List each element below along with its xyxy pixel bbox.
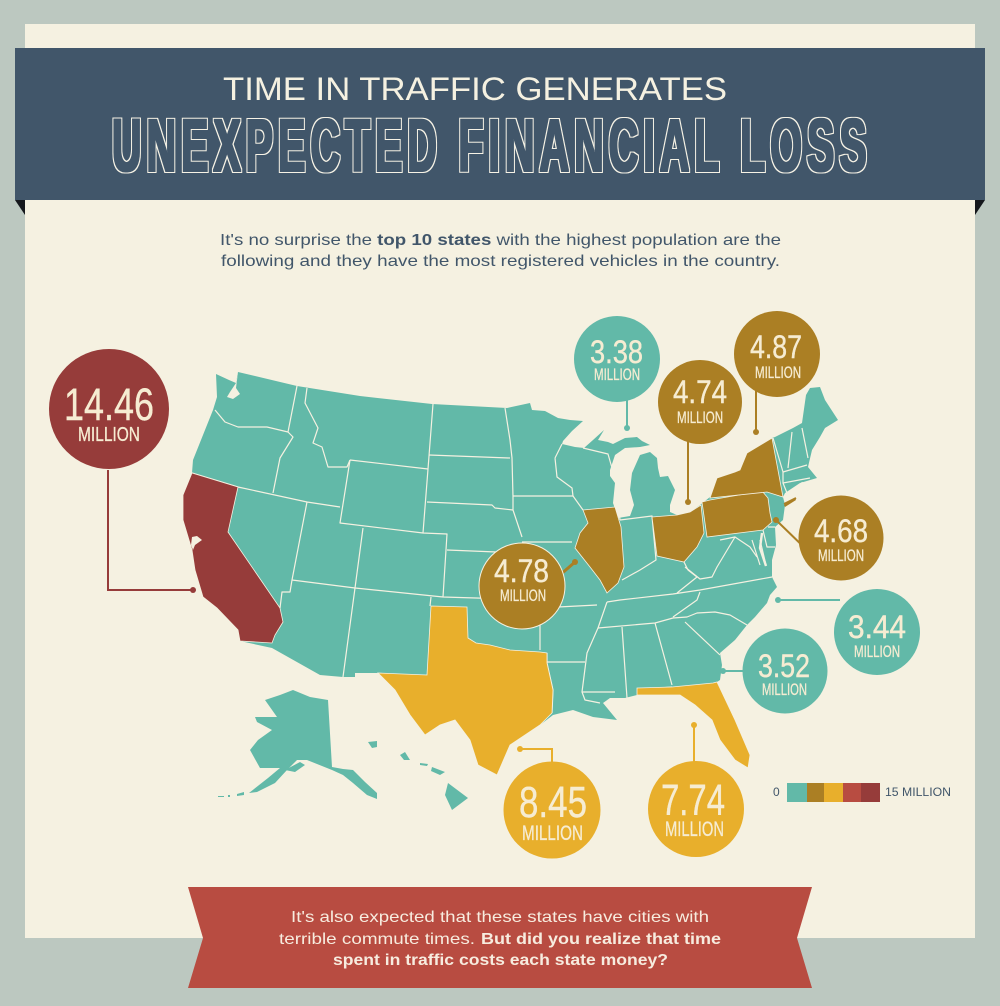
legend bbox=[773, 783, 951, 802]
title line 1: TIME IN TRAFFIC GENERATES bbox=[223, 71, 727, 107]
bottom ribbon callout: terrible commute times. bbox=[279, 931, 475, 948]
bubble: Georgia 3.52 million: 3.52 bbox=[758, 648, 810, 684]
bubble: California 14.46 million: 14.46 bbox=[64, 379, 154, 430]
state borders bbox=[192, 386, 810, 713]
bottom ribbon callout: But did you realize that time bbox=[481, 931, 721, 948]
bubble: Texas 8.45 million: MILLION bbox=[522, 822, 583, 845]
header banner bbox=[15, 48, 985, 215]
bottom ribbon callout bbox=[188, 887, 812, 988]
bottom ribbon callout: It's also expected that these states have cities with bbox=[291, 909, 709, 926]
bubble: California 14.46 million bbox=[49, 349, 169, 469]
title line 2: UNEXPECTED FINANCIAL LOSS bbox=[112, 104, 867, 187]
map of the United States bbox=[183, 372, 838, 810]
contiguous states bbox=[183, 372, 838, 775]
state: New York bbox=[710, 438, 783, 498]
intro text: following and they have the most registered vehicles in the country. bbox=[221, 253, 780, 270]
Long Island bbox=[784, 498, 796, 507]
bubble: Wisconsin area 3.38 million: 3.38 bbox=[590, 334, 643, 370]
bubble: Illinois 4.78 million: MILLION bbox=[500, 587, 546, 605]
bubble: Texas 8.45 million: 8.45 bbox=[519, 778, 587, 827]
bubble: Illinois 4.78 million: 4.78 bbox=[494, 553, 549, 589]
Chesapeake Bay bbox=[760, 533, 766, 566]
bubble: Florida 7.74 million bbox=[648, 761, 744, 857]
bubble: Pennsylvania 4.68 million: 4.68 bbox=[814, 513, 868, 549]
bubble: North Carolina 3.44 million: 3.44 bbox=[848, 609, 906, 645]
bubble: Texas 8.45 million bbox=[504, 762, 600, 858]
bubble: Pennsylvania 4.68 million: MILLION bbox=[818, 547, 864, 565]
bubble: Wisconsin area 3.38 million bbox=[574, 316, 660, 402]
intro text: It's no surprise the top 10 states with the highest population are the bbox=[220, 232, 781, 249]
legend: 15 MILLION bbox=[885, 785, 951, 799]
bubble: North Carolina 3.44 million: MILLION bbox=[854, 643, 900, 661]
leader lines bbox=[108, 390, 840, 770]
bubble: California 14.46 million: MILLION bbox=[78, 424, 140, 446]
bubble: New York 4.87 million: MILLION bbox=[755, 364, 801, 382]
bubble: Ohio 4.74 million: MILLION bbox=[677, 409, 723, 427]
legend: 0 bbox=[773, 785, 780, 799]
state: Ohio bbox=[652, 505, 704, 562]
bubble: Georgia 3.52 million: MILLION bbox=[762, 681, 807, 699]
state: Pennsylvania bbox=[702, 491, 772, 537]
bubble: Wisconsin area 3.38 million: MILLION bbox=[594, 366, 640, 384]
bubble: Illinois 4.78 million bbox=[479, 543, 565, 629]
intro text bbox=[220, 232, 781, 270]
bubble: Pennsylvania 4.68 million bbox=[798, 496, 884, 580]
Puget Sound inlet bbox=[227, 372, 240, 399]
bubble: New York 4.87 million bbox=[734, 311, 820, 397]
bubble: Georgia 3.52 million bbox=[742, 628, 828, 714]
bottom ribbon callout: spent in traffic costs each state money? bbox=[333, 952, 668, 969]
state: Florida bbox=[637, 682, 750, 768]
bubble: New York 4.87 million: 4.87 bbox=[750, 329, 802, 365]
Aleutian islands bbox=[218, 762, 305, 797]
Alaska bbox=[249, 690, 377, 799]
state: Illinois bbox=[575, 507, 624, 593]
Hawaii bbox=[368, 741, 468, 810]
bubble: Ohio 4.74 million: 4.74 bbox=[673, 374, 727, 410]
bubble: Florida 7.74 million: MILLION bbox=[665, 818, 724, 841]
state: California bbox=[183, 473, 283, 643]
bubble: Florida 7.74 million: 7.74 bbox=[661, 776, 725, 825]
state: Texas bbox=[378, 606, 553, 775]
bubble: Ohio 4.74 million bbox=[658, 360, 742, 444]
bubble: North Carolina 3.44 million bbox=[834, 589, 920, 675]
